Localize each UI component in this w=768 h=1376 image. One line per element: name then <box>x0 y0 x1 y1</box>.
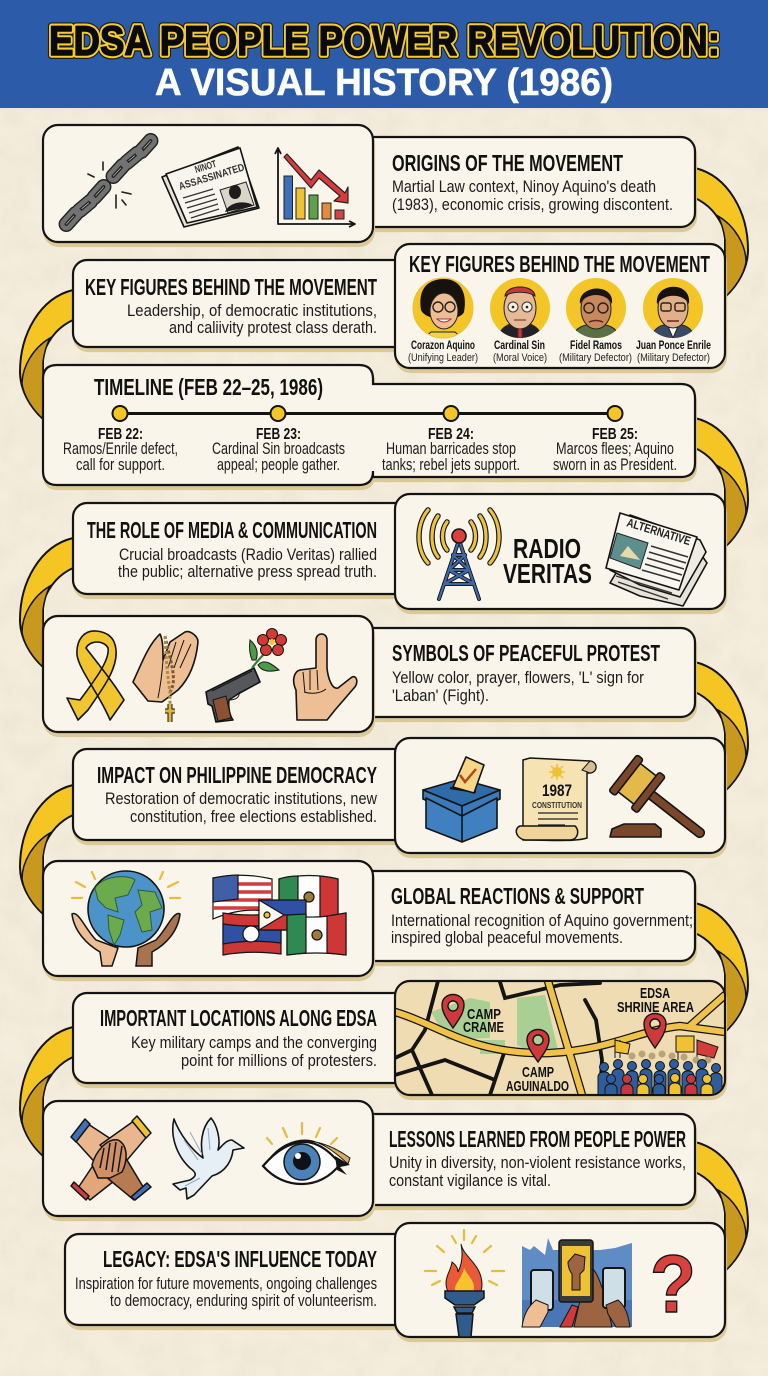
body: origins: Martial Law context, Ninoy Aquino's death <box>392 178 656 196</box>
portrait: Cardinal Sin <box>490 278 550 340</box>
panel: media icons <box>395 494 725 609</box>
icon: vigilant eye <box>263 1123 350 1184</box>
icon: phones and raised fist <box>522 1238 632 1327</box>
icon: flags <box>213 875 346 955</box>
body: media: Crucial broadcasts (Radio Veritas) rallied <box>119 546 377 564</box>
map crowd with flags <box>598 1036 722 1098</box>
captions: portraits: (Military Defector) <box>637 352 710 364</box>
icon: 1987 constitution scroll: CONSTITUTION <box>532 800 582 810</box>
body: key figures <box>127 302 377 337</box>
map pin: EDSA Shrine <box>644 1014 666 1048</box>
label: Radio Veritas <box>503 533 592 589</box>
timeline event: Feb 23 <box>212 426 345 474</box>
icon: alternative newspapers <box>606 513 707 606</box>
icon: radio tower <box>419 510 499 599</box>
panel: impact text <box>73 749 433 840</box>
body: lessons: Unity in diversity, non-violent resistance works, <box>389 1154 686 1172</box>
ribbon connector 6 <box>20 785 73 914</box>
body: symbols: 'Laban' (Fight). <box>392 687 489 705</box>
body: media: the public; alternative press spread truth. <box>118 563 377 581</box>
timeline event: Feb 25: sworn in as President. <box>553 456 677 474</box>
body: legacy: Inspiration for future movements, ongoing challenges <box>75 1275 377 1293</box>
ribbon connector 5 <box>695 662 748 791</box>
panel: lessons icons <box>43 1101 373 1216</box>
heading: timeline: TIMELINE (FEB 22–25, 1986) <box>94 374 323 400</box>
timeline event: Feb 25: FEB 25: <box>592 426 638 443</box>
icon: dove <box>173 1118 244 1199</box>
icon: falling bar chart <box>275 148 355 227</box>
body: locations: point for millions of protesters. <box>181 1052 377 1070</box>
panel: impact icons <box>395 738 725 854</box>
body: lessons <box>389 1154 686 1190</box>
heading: locations: IMPORTANT LOCATIONS ALONG EDSA <box>100 1005 377 1031</box>
icon: joined hands <box>71 1116 151 1200</box>
ribbon connector 3 <box>695 418 748 547</box>
map labels: EDSA <box>640 985 670 1002</box>
icon: newspaper <box>162 147 259 227</box>
icon: globe in hands <box>72 871 180 966</box>
panel: legacy text <box>65 1234 433 1325</box>
body: locations <box>131 1034 377 1070</box>
heading: global: GLOBAL REACTIONS & SUPPORT <box>391 883 644 909</box>
icon: question mark: ? <box>650 1239 696 1330</box>
timeline event: Feb 23: Cardinal Sin broadcasts <box>212 440 345 458</box>
icon: broken chain <box>61 135 156 230</box>
icon: gavel <box>609 755 717 854</box>
icon: L sign hand <box>294 634 357 720</box>
icon: praying hands with rosary <box>133 632 198 722</box>
timeline event: Feb 22 <box>63 426 178 474</box>
ribbon connector 9 <box>695 1142 748 1271</box>
icon: newspaper: NINOT <box>194 159 218 176</box>
ribbon connector 7 <box>695 903 748 1032</box>
portrait: Juan Ponce Enrile <box>643 278 703 340</box>
body: key figures: Leadership, of democratic institutions, <box>127 302 377 320</box>
body: key figures: and caliivity protest class derath. <box>169 319 377 337</box>
subtitle: A VISUAL HISTORY (1986) <box>155 62 613 104</box>
map green areas <box>431 995 558 1054</box>
icon: torch <box>425 1230 504 1337</box>
panel: origins text <box>340 137 695 227</box>
icon: alternative newspapers: ALTERNATIVE <box>625 515 692 548</box>
panel: symbols icons <box>43 616 373 732</box>
map labels: CRAME <box>463 1019 504 1036</box>
captions: portraits: Cardinal Sin <box>494 338 545 352</box>
icon: 1987 constitution scroll: 1987 <box>542 781 572 800</box>
body: global: inspired global peaceful movements. <box>391 929 623 947</box>
captions: portraits: (Military Defector) <box>559 352 632 364</box>
timeline event: Feb 24: FEB 24: <box>428 426 474 443</box>
header banner <box>0 0 768 110</box>
ribbon connector 4 <box>20 538 73 667</box>
body: impact <box>105 790 377 826</box>
heading: legacy: LEGACY: EDSA'S INFLUENCE TODAY <box>103 1246 377 1272</box>
map labels: AGUINALDO <box>506 1078 569 1095</box>
body: impact: Restoration of democratic institutions, new <box>105 790 377 808</box>
panel: legacy icons <box>395 1223 725 1337</box>
body: symbols: Yellow color, prayer, flowers, 'L' sign for <box>392 669 644 687</box>
captions: portraits: Fidel Ramos <box>570 338 622 352</box>
captions: portraits: (Moral Voice) <box>493 352 547 364</box>
panel: media text <box>73 503 433 594</box>
body: global: International recognition of Aquino government; <box>391 912 693 930</box>
body: impact: constitution, free elections established. <box>130 808 377 826</box>
map pin: Camp Crame <box>442 994 464 1028</box>
map minor roads <box>395 981 602 1095</box>
panel: symbols text <box>340 628 695 717</box>
captions: portraits: Corazon Aquino <box>411 338 475 352</box>
timeline event: Feb 25 <box>553 426 677 474</box>
timeline event: Feb 24: Human barricades stop <box>386 440 516 458</box>
panel: key figures text <box>73 260 433 347</box>
timeline event: Feb 24: tanks; rebel jets support. <box>382 456 520 474</box>
timeline event: Feb 24 <box>382 426 520 474</box>
body: media <box>118 546 377 581</box>
map labels: SHRINE AREA <box>617 999 694 1016</box>
heading: key figures: KEY FIGURES BEHIND THE MOVEMENT <box>85 274 377 300</box>
panel: timeline <box>43 365 695 485</box>
map labels: CAMP <box>467 1006 501 1023</box>
timeline event: Feb 23: appeal; people gather. <box>217 456 340 474</box>
body: lessons: constant vigilance is vital. <box>389 1172 551 1190</box>
captions: portraits <box>408 338 711 364</box>
map labels: CAMP <box>522 1064 554 1081</box>
heading: media: THE ROLE OF MEDIA & COMMUNICATION <box>87 517 377 543</box>
body: symbols <box>392 669 644 705</box>
icon: yellow ribbon <box>67 631 124 720</box>
map EDSA roads <box>395 981 725 1095</box>
label: Radio Veritas: RADIO <box>513 533 581 564</box>
heading: origins: ORIGINS OF THE MOVEMENT <box>392 150 623 176</box>
captions: portraits: Juan Ponce Enrile <box>636 338 711 352</box>
captions: portraits: (Unifying Leader) <box>408 352 478 364</box>
panel: key figures portraits <box>395 244 725 368</box>
body: origins <box>392 178 673 214</box>
timeline event: Feb 22: Ramos/Enrile defect, <box>63 440 178 458</box>
icon: 1987 constitution scroll <box>516 758 596 840</box>
body: global <box>391 912 693 947</box>
ribbon connector 1 <box>695 168 748 297</box>
map pin: Camp Aguinaldo <box>527 1030 549 1062</box>
timeline event: Feb 22: call for support. <box>76 456 165 474</box>
map labels <box>463 985 694 1095</box>
panel: origins icons <box>43 125 373 242</box>
icon: ballot box <box>423 757 500 842</box>
ribbon connector 8 <box>20 1027 73 1156</box>
panel: lessons text <box>340 1114 695 1205</box>
heading: impact: IMPACT ON PHILIPPINE DEMOCRACY <box>97 762 377 788</box>
ribbon connector 2 <box>20 290 73 419</box>
panel: locations map <box>395 981 725 1098</box>
label: Radio Veritas: VERITAS <box>503 558 592 589</box>
panel: global icons <box>43 861 373 976</box>
body: legacy <box>75 1275 377 1310</box>
body: origins: (1983), economic crisis, growing discontent. <box>392 196 673 214</box>
timeline line and markers <box>112 406 622 421</box>
timeline event: Feb 22: FEB 22: <box>98 426 143 443</box>
icon: gun with flower <box>206 628 286 722</box>
body: locations: Key military camps and the converging <box>131 1034 377 1052</box>
portrait: Corazon Aquino <box>413 278 473 340</box>
timeline event: Feb 23: FEB 23: <box>256 426 301 443</box>
icon: newspaper: ASSASSINATED <box>177 161 246 193</box>
panel: global text <box>340 871 695 961</box>
panel: locations text <box>73 993 433 1083</box>
body: legacy: to democracy, enduring spirit of volunteerism. <box>110 1292 377 1310</box>
timeline event: Feb 25: Marcos flees; Aquino <box>556 440 674 458</box>
portrait: Fidel Ramos <box>566 278 626 340</box>
